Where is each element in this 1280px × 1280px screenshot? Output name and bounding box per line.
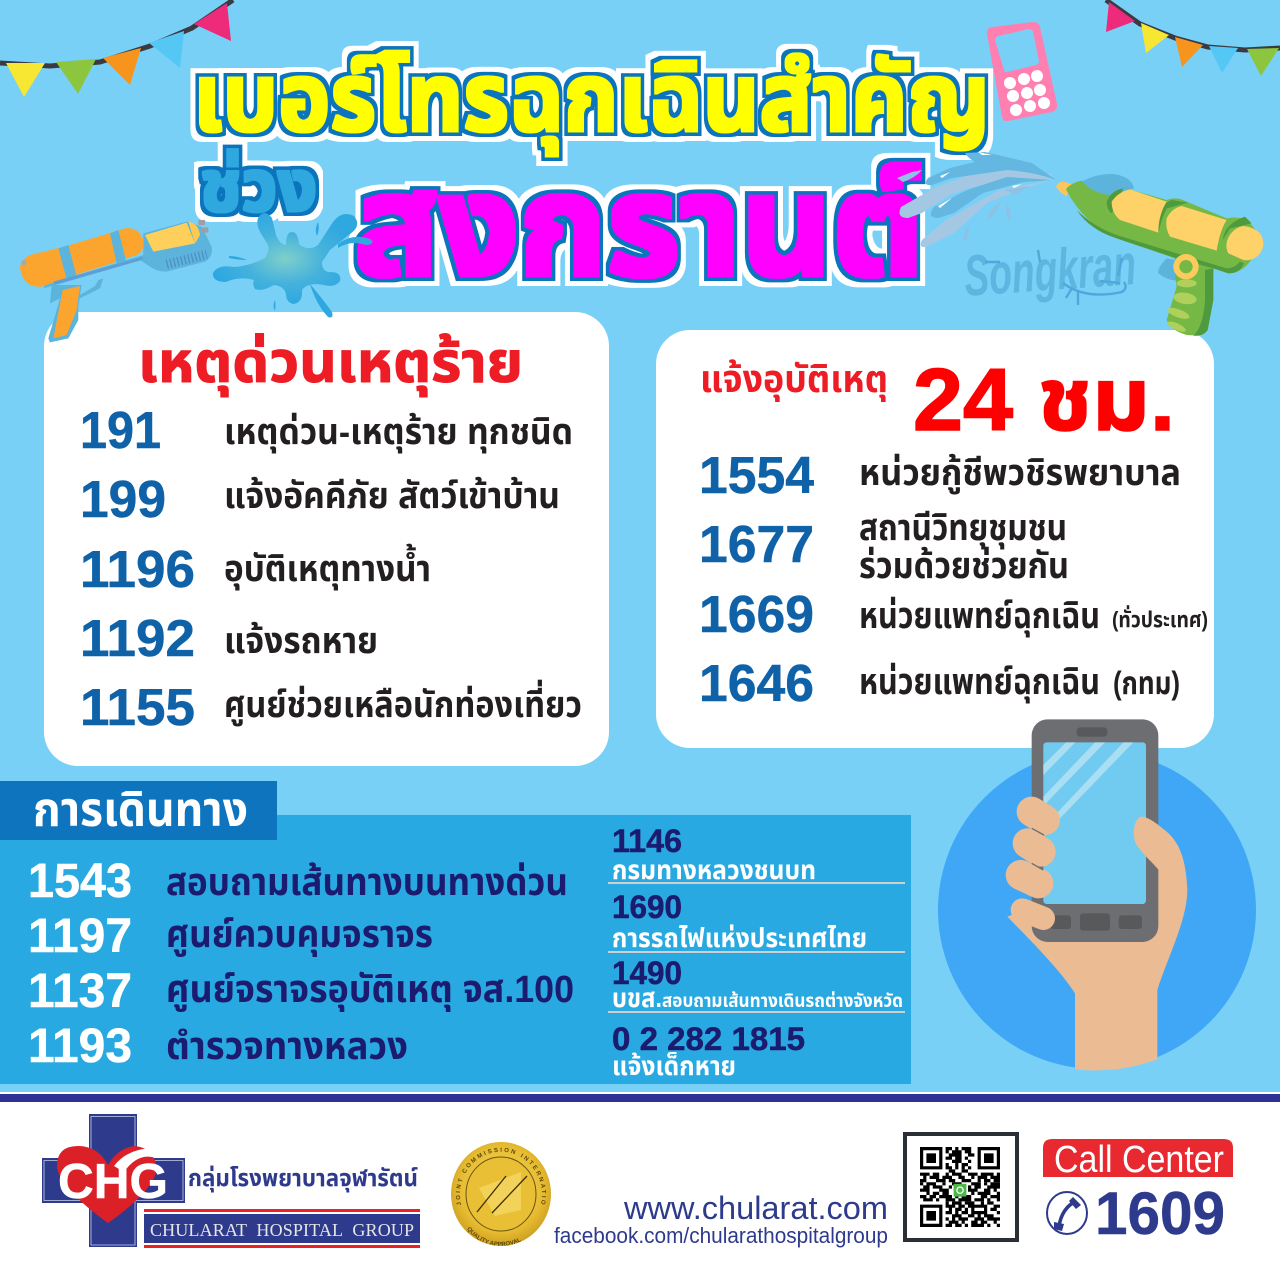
label missing child: แจ้งเด็กหาย: [612, 1051, 736, 1081]
number 1155: 1155: [80, 679, 195, 737]
number 1196: 1196: [80, 541, 195, 599]
text: facebook page: facebook.com/chularathospitalgroup: [554, 1223, 888, 1248]
number 1690: 1690: [612, 889, 682, 925]
label 1490 abbreviation: บขส.: [612, 983, 662, 1013]
label 1155: ศูนย์ช่วยเหลือนักท่องเที่ยว: [224, 679, 582, 726]
icon: water splash: [213, 213, 372, 317]
number 1646: 1646: [699, 655, 814, 713]
logo: Thai group name: กลุ่มโรงพยาบาลจุฬารัตน์: [188, 1164, 418, 1193]
panel: urgent incidents: [44, 312, 609, 766]
label 1677 line 2: ร่วมด้วยช่วยกัน: [859, 545, 1069, 586]
bunting: top left: [0, 0, 233, 97]
label 1690: การรถไฟแห่งประเทศไทย: [612, 923, 867, 953]
icon: pink mobile phone: [987, 22, 1057, 121]
panel: travel: [0, 781, 911, 1084]
number 1193: 1193: [28, 1020, 132, 1073]
icon: JCI gold seal: [451, 1142, 551, 1246]
number 191: 191: [80, 402, 161, 460]
number 1677: 1677: [699, 516, 814, 574]
number 1490: 1490: [612, 955, 682, 991]
text: call center number: 1609: [1095, 1180, 1225, 1247]
tab: travel heading: การเดินทาง: [33, 784, 248, 837]
logo: CHG cross and heart: CHG: [58, 1155, 168, 1209]
heading: 24 hours: 24 ชม.: [913, 350, 1175, 449]
label 199: แจ้งอัคคีภัย สัตว์เข้าบ้าน: [224, 475, 560, 516]
icon: JCI gold seal: JOINT COMMISSION INTERNATIONAL: [456, 1148, 546, 1206]
number 1137: 1137: [28, 965, 132, 1018]
label 1197: ศูนย์ควบคุมจราจร: [166, 914, 433, 957]
logo: CHG cross and heart: [42, 1114, 185, 1247]
number 1197: 1197: [28, 910, 132, 963]
bunting: top right: [1106, 0, 1280, 76]
title: word chuang: ช่วง: [200, 147, 317, 227]
label 1193: ตำรวจทางหลวง: [166, 1026, 408, 1068]
script word: Songkran: Songkran: [962, 232, 1138, 309]
number 1554: 1554: [699, 447, 814, 505]
number 199: 199: [80, 471, 166, 529]
number 1543: 1543: [28, 855, 132, 908]
number 1146: 1146: [612, 823, 682, 859]
label 1146: กรมทางหลวงชนบท: [612, 855, 816, 885]
icon: green water gun: [1056, 174, 1263, 336]
label 1646: หน่วยแพทย์ฉุกเฉิน: [859, 661, 1100, 703]
title: Songkran in Thai: สงกรานต์: [354, 147, 924, 306]
label 1137: ศูนย์จราจรอุบัติเหตุ จส.100: [166, 969, 574, 1012]
label 1192: แจ้งรถหาย: [224, 620, 378, 661]
icon: orange water gun: [20, 220, 212, 342]
heading: urgent incidents: เหตุด่วนเหตุร้าย: [138, 331, 523, 397]
number 1669: 1669: [699, 586, 814, 644]
label 1669: หน่วยแพทย์ฉุกเฉิน: [859, 595, 1100, 637]
icon: water spray: [897, 152, 1056, 247]
label 1669 note: (ทั่วประเทศ): [1112, 605, 1208, 632]
icon: JCI gold seal: QUALITY APPROVAL: [468, 1227, 521, 1246]
icon: telephone handset: [1047, 1192, 1087, 1234]
QR code: [905, 1134, 1017, 1240]
label 1554: หน่วยกู้ชีพวชิรพยาบาล: [859, 452, 1181, 494]
script word: Songkran: [962, 232, 1138, 309]
panel: 24-hour reporting: [656, 330, 1214, 748]
number 1192: 1192: [80, 610, 195, 668]
logo: English group name bar: CHULARAT HOSPITAL GROUP: [150, 1220, 414, 1240]
title: line 1: เบอร์โทรฉุกเฉินสำคัญ: [193, 45, 990, 156]
label 1196: อุบัติเหตุทางน้ำ: [224, 543, 431, 590]
text: website: www.chularat.com: [623, 1190, 888, 1226]
label 1646 note: (กทม): [1113, 665, 1180, 701]
label 1490 description: สอบถามเส้นทางเดินรถต่างจังหวัด: [662, 990, 903, 1012]
label 1543: สอบถามเส้นทางบนทางด่วน: [166, 862, 568, 904]
label 1677 line 1: สถานีวิทยุชุมชน: [859, 507, 1067, 549]
badge: call center: Call Center: [1054, 1139, 1224, 1181]
heading: report accidents: แจ้งอุบัติเหตุ: [700, 359, 888, 402]
label 191: เหตุด่วน-เหตุร้าย ทุกชนิด: [224, 411, 573, 453]
illustration: hand holding smartphone: [938, 719, 1256, 1070]
logo: English group name bar: [144, 1209, 420, 1248]
number missing child line: 0 2 282 1815: [612, 1021, 805, 1057]
